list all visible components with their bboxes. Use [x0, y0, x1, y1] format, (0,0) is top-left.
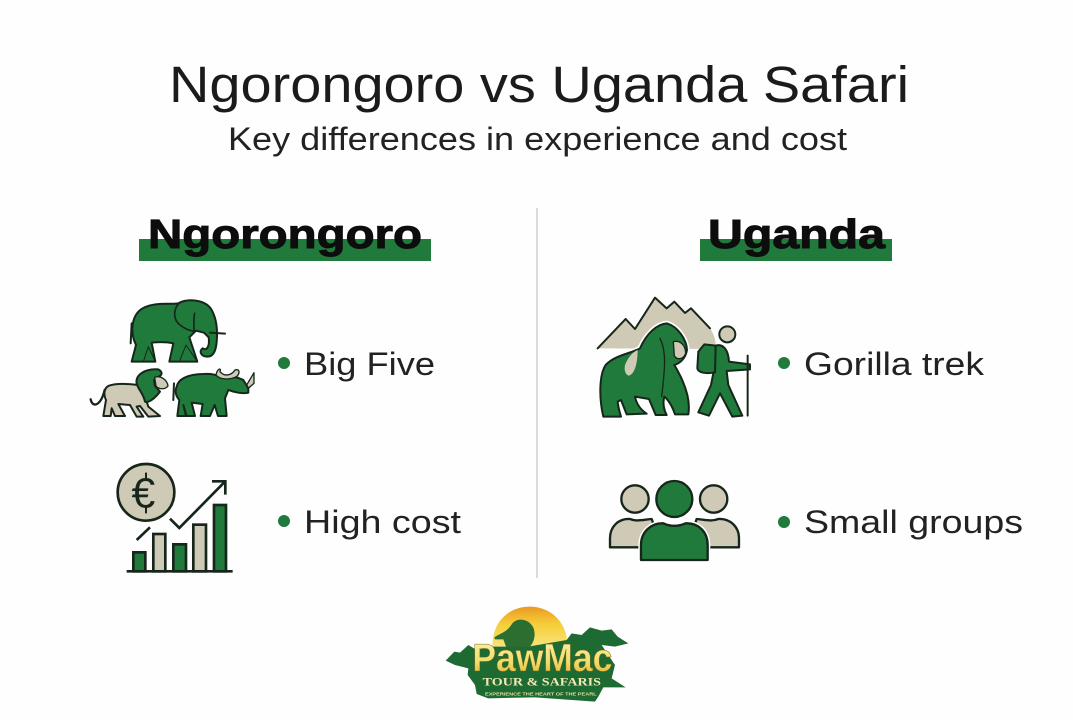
title: Ngorongoro vs Uganda Safari — [169, 56, 909, 113]
icon: euro cost chart — [118, 464, 233, 571]
gorilla — [600, 323, 689, 417]
mountains — [598, 298, 716, 349]
hiker — [719, 326, 735, 342]
logo slogan: EXPERIENCE THE HEART OF THE PEARL — [485, 691, 597, 697]
elephant — [131, 300, 225, 362]
icon: small group — [610, 481, 739, 560]
bullet: Small groups: Small groups — [804, 504, 1023, 540]
subtitle: Key differences in experience and cost — [228, 121, 847, 157]
logo: PawMac — [446, 607, 628, 702]
icon: gorilla and hiker — [598, 298, 750, 417]
icon: Big Five animals — [91, 300, 254, 417]
buffalo — [173, 369, 254, 416]
logo wordmark: PawMac — [472, 636, 612, 680]
heading: Ngorongoro: Ngorongoro — [148, 211, 422, 257]
growth arrow — [137, 481, 225, 540]
bullet: High cost: High cost — [304, 504, 461, 540]
elephant silhouette — [494, 620, 535, 648]
euro coin: € — [131, 469, 155, 517]
bullet: Big Five: Big Five — [304, 346, 435, 382]
heading: Uganda: Uganda — [708, 211, 886, 257]
bars — [133, 505, 226, 571]
bullet: Gorilla trek: Gorilla trek — [804, 346, 985, 382]
logo tagline: TOUR & SAFARIS — [483, 674, 601, 688]
lion — [91, 369, 168, 417]
sun — [492, 607, 568, 647]
foliage — [446, 627, 628, 702]
